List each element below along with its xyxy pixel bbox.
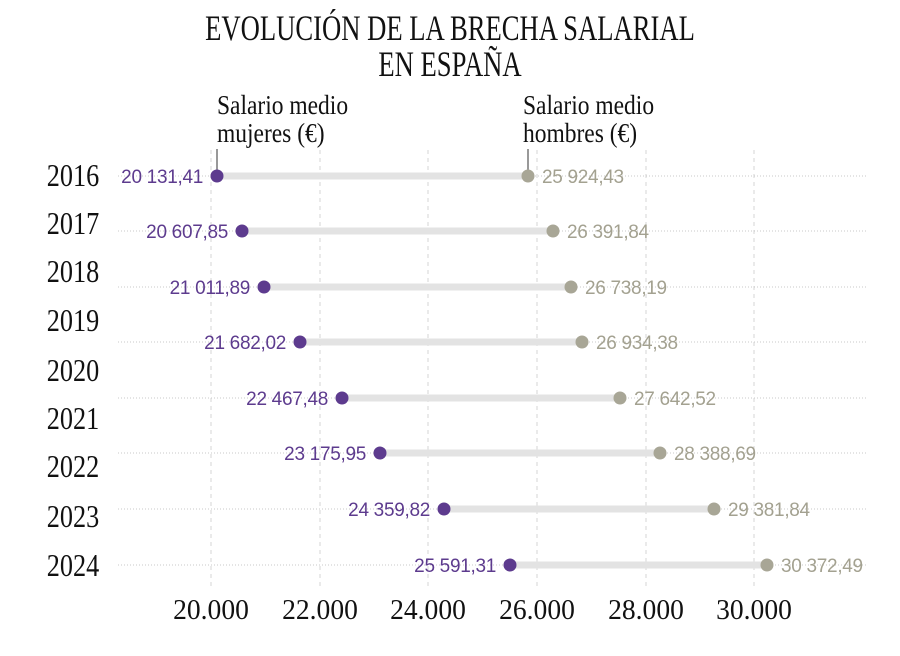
year labels: 2016	[47, 159, 99, 194]
year labels: 2019	[47, 304, 99, 339]
year labels: 2020	[47, 354, 99, 389]
dumbbell chart: 26 738,19	[585, 278, 667, 299]
dumbbell chart: 24 359,82	[348, 500, 430, 521]
year labels: 2017	[47, 207, 99, 242]
year labels: 2024	[47, 549, 100, 584]
x axis labels	[173, 594, 792, 626]
dumbbell chart: 20 607,85	[146, 222, 228, 243]
dumbbell chart: 26 391,84	[567, 222, 650, 243]
dumbbell chart: 26 934,38	[596, 333, 678, 354]
legend: men label	[523, 91, 654, 172]
x axis labels: 22.000	[282, 594, 358, 626]
x axis labels: 30.000	[716, 594, 792, 626]
legend: women label	[217, 91, 348, 172]
dumbbell chart: 21 011,89	[170, 278, 250, 299]
dumbbell chart: 20 131,41	[121, 167, 203, 188]
dumbbell chart: 22 467,48	[246, 389, 328, 410]
year labels: 2021	[47, 402, 99, 437]
year labels: 2018	[47, 255, 99, 290]
title: EVOLUCIÓN DE LA BRECHA SALARIAL	[205, 8, 695, 48]
year labels: 2022	[47, 450, 99, 485]
x axis labels: 28.000	[608, 594, 684, 626]
dumbbell chart: 23 175,95	[284, 444, 366, 465]
grid	[211, 150, 754, 588]
dumbbell chart: 21 682,02	[204, 333, 286, 354]
legend: women label: Salario medio	[217, 91, 348, 120]
legend: women label: mujeres (€)	[217, 119, 325, 148]
title	[205, 8, 695, 84]
year labels	[47, 159, 100, 584]
legend: men label: hombres (€)	[523, 119, 637, 148]
x axis labels: 26.000	[499, 594, 575, 626]
dumbbell chart: 30 372,49	[781, 556, 863, 577]
x axis labels: 20.000	[173, 594, 249, 626]
dumbbell chart: 29 381,84	[728, 500, 811, 521]
dumbbell chart: 25 591,31	[414, 556, 496, 577]
legend: men label: Salario medio	[523, 91, 654, 120]
x axis labels: 24.000	[390, 594, 466, 626]
dumbbell chart: 28 388,69	[674, 444, 756, 465]
title: EN ESPAÑA	[378, 44, 522, 84]
year labels: 2023	[47, 500, 99, 535]
dumbbell chart: 27 642,52	[634, 389, 716, 410]
dumbbell chart: 25 924,43	[542, 167, 624, 188]
dumbbell chart	[121, 167, 863, 577]
